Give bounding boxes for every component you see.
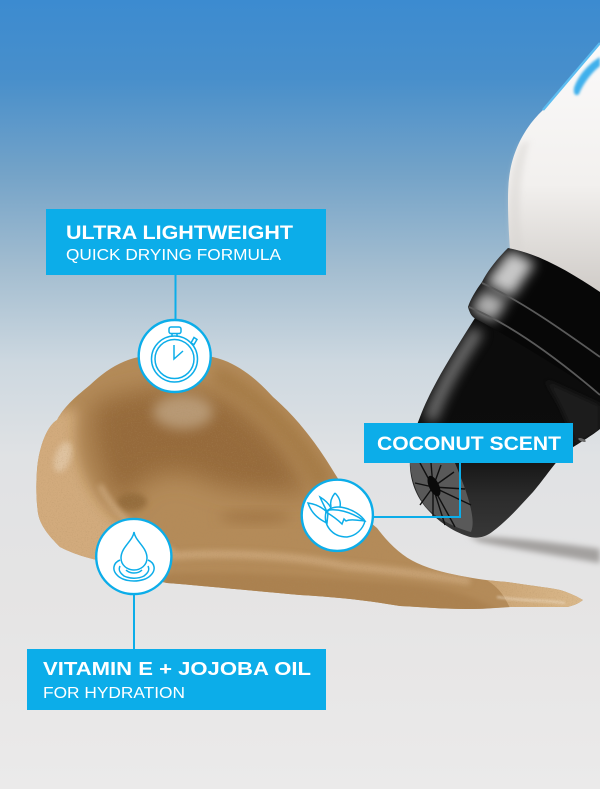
curved crater lip highlight — [100, 485, 175, 553]
upper crest shading — [215, 365, 335, 490]
callout: ultra lightweight — [46, 209, 326, 275]
connector: vitamin e — [133, 595, 135, 649]
lower crater shadow — [117, 493, 147, 511]
callout: vitamin e + jojoba oil: FOR HYDRATION — [43, 685, 185, 702]
callout: ultra lightweight: ULTRA LIGHTWEIGHT — [66, 222, 293, 244]
foam grain — [37, 402, 577, 606]
callout: vitamin e + jojoba oil — [27, 649, 326, 710]
foundation swatch — [36, 356, 583, 609]
nozzle side highlight — [578, 437, 586, 443]
callout: vitamin e + jojoba oil: VITAMIN E + JOJOBA OIL — [43, 658, 311, 679]
glossy highlight — [153, 395, 213, 429]
blue edge line — [543, 43, 600, 110]
blue label swoosh — [574, 57, 600, 95]
bottle left edge shading — [509, 140, 530, 252]
collar highlights — [485, 250, 535, 297]
thin tip — [487, 580, 583, 607]
front lip highlight — [170, 554, 470, 581]
bottle body — [508, 43, 600, 300]
dark inner crater — [91, 388, 310, 505]
tip highlight streak — [497, 597, 565, 603]
nozzle side lighter panel — [550, 384, 600, 446]
callout: coconut scent — [364, 423, 573, 463]
collar grooves — [469, 283, 600, 395]
callout: coconut scent: COCONUT SCENT — [377, 433, 561, 455]
product bottle — [400, 43, 600, 545]
swatch base colour — [36, 356, 583, 609]
light outer rim — [36, 406, 120, 560]
rim glare — [52, 440, 74, 474]
nozzle face with spokes — [410, 463, 473, 532]
icon: water drop with ripples — [96, 519, 171, 594]
lip body — [163, 575, 494, 609]
callout: ultra lightweight: QUICK DRYING FORMULA — [66, 247, 281, 264]
ground shadow of the bottle — [468, 536, 600, 563]
icon: coconut and leaves — [302, 480, 373, 551]
icon: stopwatch — [139, 320, 211, 392]
nozzle — [410, 318, 600, 538]
collar — [468, 248, 600, 370]
nozzle left edge highlight — [430, 330, 478, 420]
connector: ultra lightweight — [174, 275, 176, 320]
connector: coconut scent — [373, 463, 460, 517]
